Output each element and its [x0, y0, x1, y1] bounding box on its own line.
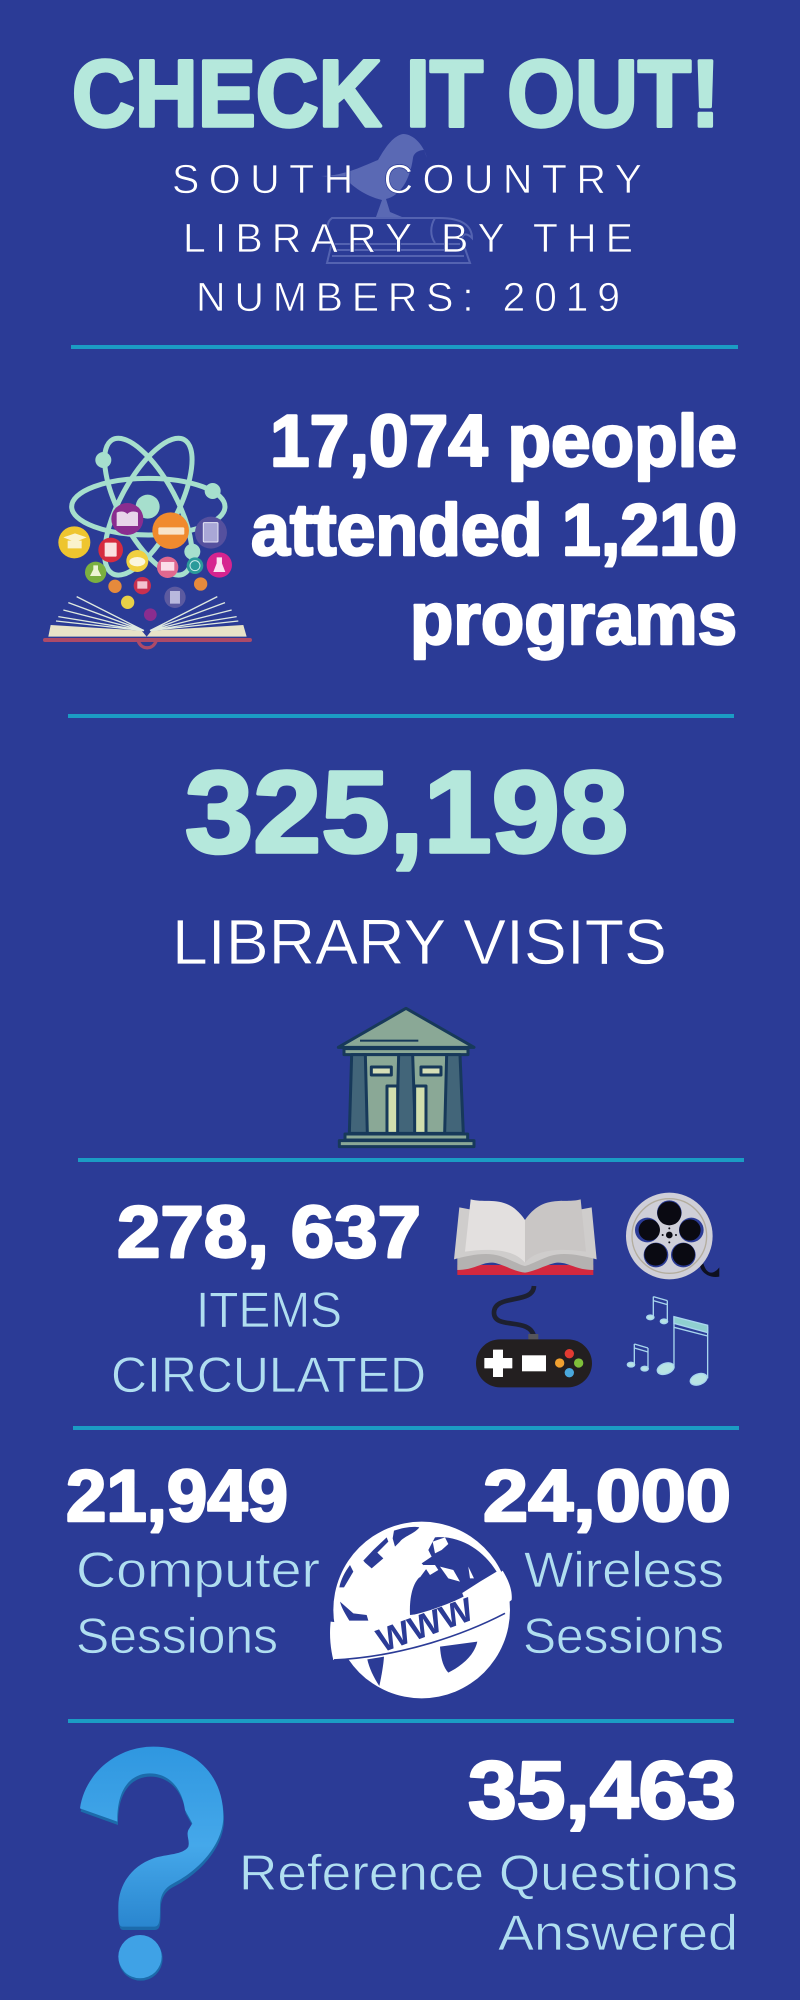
- icon: film reel: [626, 1193, 719, 1279]
- statistic: reference questions: [239, 1745, 738, 1961]
- icon: music notes: [627, 1297, 709, 1387]
- statistic: programs attendance: 17,074 people: [270, 401, 737, 482]
- statistic: items circulated number: 278, 637: [117, 1192, 421, 1273]
- icon: library building: [338, 1008, 474, 1147]
- statistic: computer sessions: [66, 1456, 320, 1664]
- subtitle: NUMBERS: 2019: [196, 274, 620, 320]
- statistic: reference questions: 35,463: [468, 1745, 736, 1836]
- icon: open book: [454, 1199, 597, 1275]
- statistic: wireless sessions: [483, 1456, 731, 1664]
- icons: circulated media: [454, 1193, 719, 1387]
- statistic: wireless sessions: Sessions: [523, 1608, 724, 1664]
- label: library visits: LIBRARY VISITS: [172, 906, 667, 978]
- label: items circulated: [111, 1282, 426, 1403]
- logo watermark: seabird on books: [321, 134, 472, 263]
- statistic: wireless sessions: Wireless: [524, 1542, 724, 1598]
- statistic: computer sessions: Computer: [76, 1542, 320, 1598]
- label: items circulated: CIRCULATED: [111, 1347, 426, 1403]
- statistic: computer sessions: 21,949: [66, 1456, 288, 1537]
- title: CHECK IT OUT!: [72, 41, 720, 147]
- subtitle: SOUTH COUNTRY: [172, 156, 642, 202]
- statistic: computer sessions: Sessions: [76, 1608, 278, 1664]
- label: items circulated: ITEMS: [196, 1282, 342, 1338]
- statistic: reference questions: Answered: [498, 1905, 738, 1961]
- statistic: library visits number: 325,198: [185, 747, 628, 877]
- icon: game controller: [476, 1286, 592, 1387]
- statistic: reference questions: Reference Questions: [239, 1845, 738, 1901]
- icon: globe with www band: [330, 1522, 512, 1698]
- statistic: programs attendance: programs: [410, 579, 737, 660]
- statistic: wireless sessions: 24,000: [483, 1456, 731, 1537]
- subtitle: LIBRARY BY THE: [183, 215, 633, 261]
- icon: question mark with head silhouette: [80, 1747, 224, 1981]
- statistic: programs attendance: [251, 401, 737, 660]
- statistic: programs attendance: attended 1,210: [251, 490, 737, 571]
- icon: globe with www band: WWW: [372, 1591, 479, 1660]
- icon: atom and open book of knowledge: [45, 426, 250, 648]
- subtitle: [172, 156, 642, 320]
